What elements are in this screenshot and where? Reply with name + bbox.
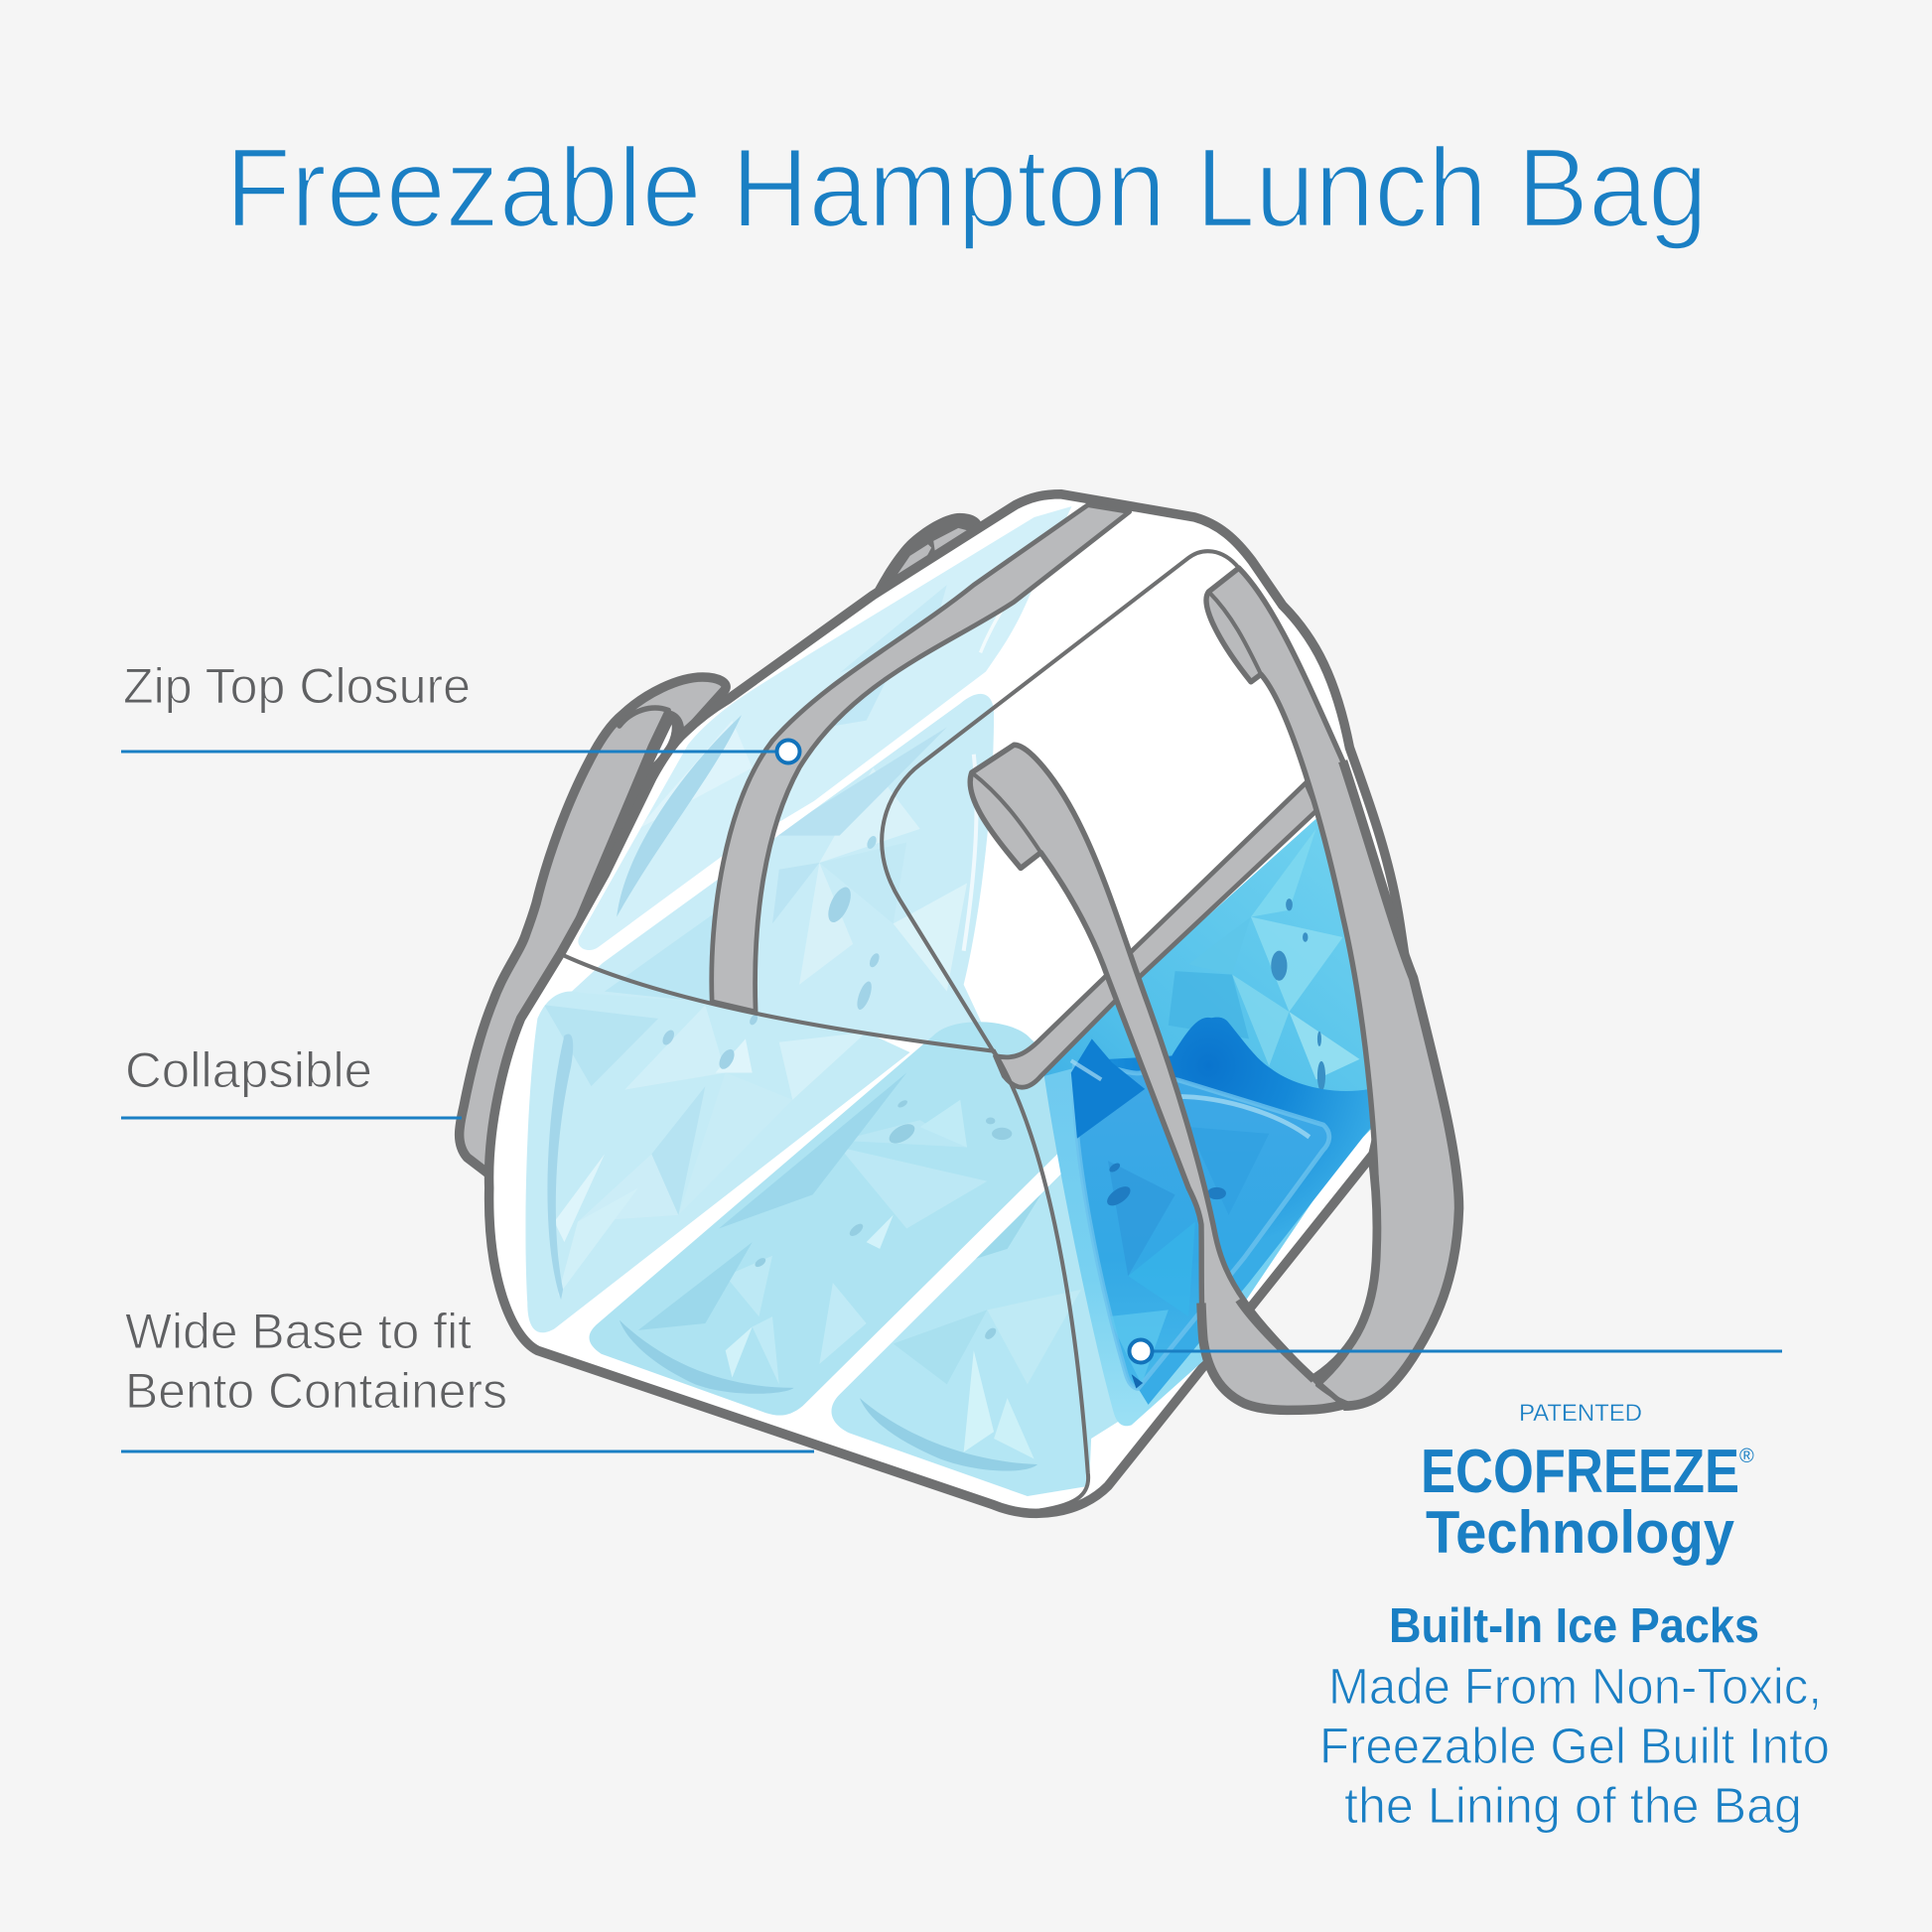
ice panel: upper centre — [572, 693, 994, 1040]
ecofreeze logo text — [1421, 1400, 1754, 1566]
label: wide base: Wide Base to fit — [125, 1304, 472, 1359]
right handle strap — [1206, 568, 1459, 1406]
zip strap — [712, 505, 1130, 1012]
infographic canvas — [121, 146, 1827, 1833]
ice panel: back right — [1044, 819, 1370, 1139]
ecofreeze leader line — [1130, 1340, 1782, 1362]
seam lines — [561, 954, 1088, 1512]
gray side band — [995, 782, 1317, 1087]
bag body outline — [489, 494, 1410, 1513]
ice packs description: Built-In Ice Packs — [1389, 1599, 1759, 1653]
zip flap outline — [882, 551, 1239, 1052]
label: collapsible: Collapsible — [125, 1042, 372, 1098]
ice packs description: Freezable Gel Built Into — [1319, 1718, 1830, 1774]
label: zip top closure — [121, 658, 800, 762]
ice panel: front right — [832, 1173, 1118, 1496]
front handle strap — [970, 745, 1356, 1410]
ecofreeze logo text: PATENTED — [1519, 1400, 1642, 1427]
ice packs description — [1319, 1599, 1830, 1834]
back handle — [870, 513, 982, 599]
ice packs description: the Lining of the Bag — [1344, 1777, 1802, 1834]
label: zip top closure: Zip Top Closure — [123, 658, 471, 714]
ecofreeze logo text: Technology — [1426, 1499, 1735, 1566]
side inner panel — [1071, 1038, 1329, 1389]
deep blue hump — [1071, 1018, 1371, 1405]
side sheet light blue — [1044, 1059, 1370, 1426]
ice packs description: Made From Non-Toxic, — [1328, 1658, 1822, 1715]
label: wide base — [121, 1304, 814, 1451]
title: Freezable Hampton Lunch Bag — [225, 125, 1708, 250]
ice panel: upper left — [571, 496, 1081, 958]
ice panel: front middle — [590, 1022, 1057, 1416]
ecofreeze logo text: ® — [1739, 1446, 1754, 1467]
ecofreeze logo text: ECOFREEZE — [1421, 1438, 1739, 1506]
back left strap — [460, 677, 726, 1174]
ice panel: front left — [526, 991, 909, 1332]
lunch bag illustration — [460, 494, 1459, 1513]
label: wide base: Bento Containers — [125, 1363, 507, 1419]
